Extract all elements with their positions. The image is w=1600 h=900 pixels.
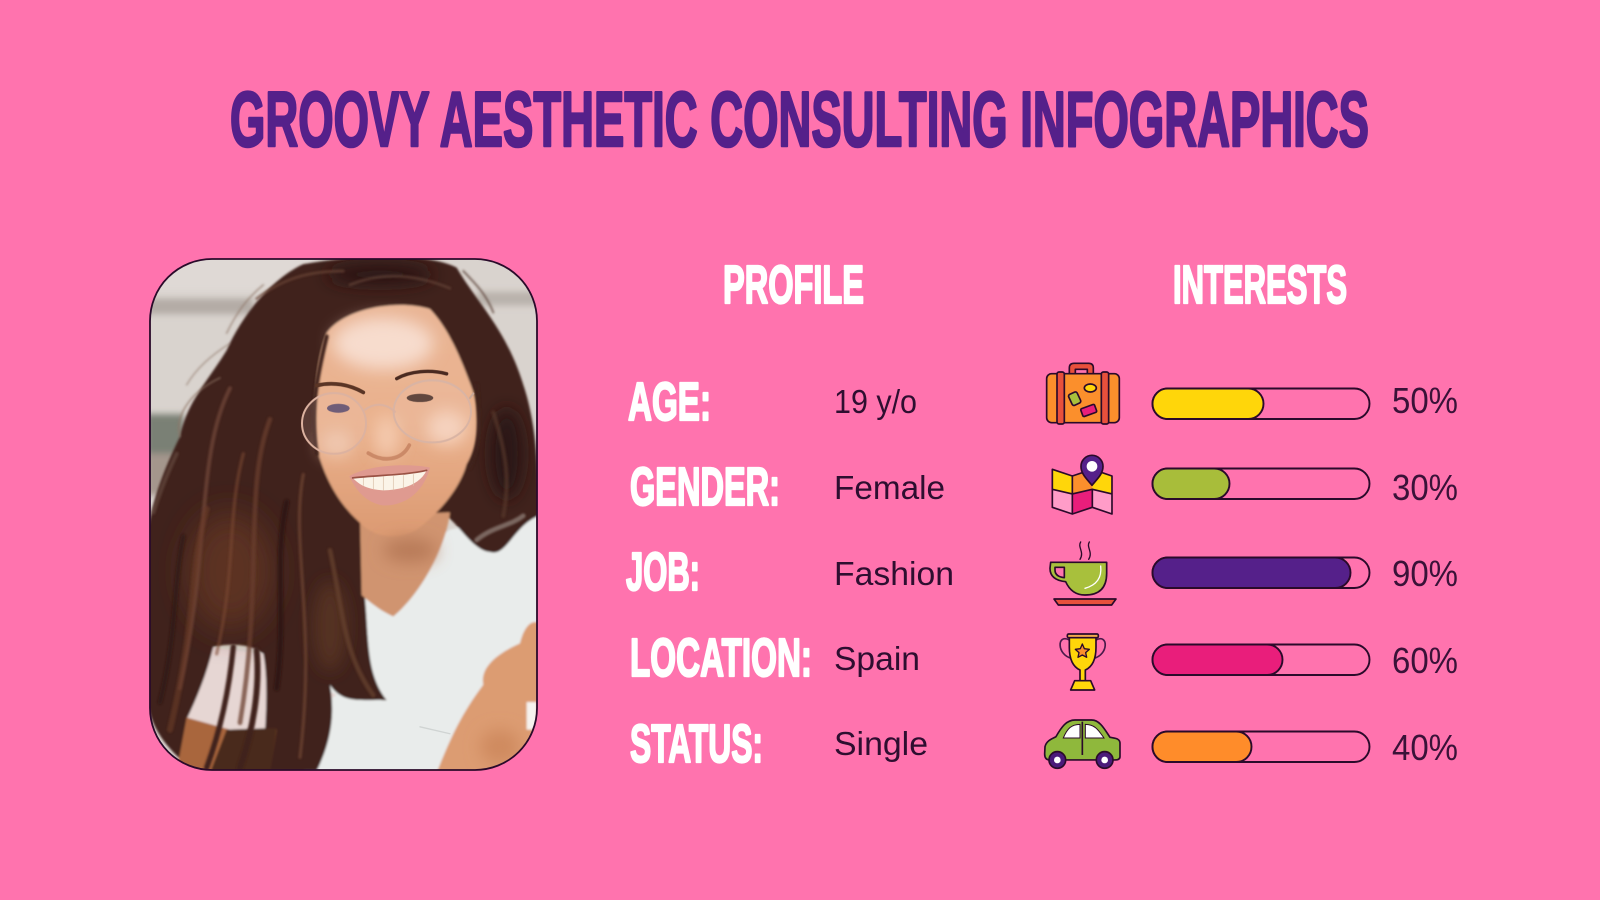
label: 30%: 30% [1392, 467, 1458, 508]
location label: LOCATION: [630, 628, 812, 688]
profile rows [626, 372, 954, 774]
bar: 60% [1152, 644, 1370, 675]
status value: Single [834, 725, 928, 762]
bar: 90% [1152, 558, 1370, 588]
gender value: Female [834, 469, 945, 506]
nose [368, 445, 409, 459]
icon: teacup [1050, 542, 1116, 605]
icon: car [1045, 720, 1120, 768]
hair strands [180, 388, 230, 688]
job label: JOB: [626, 542, 700, 602]
age value: 19 y/o [834, 383, 917, 420]
bar: 50% [1152, 388, 1370, 419]
location value: Spain [834, 640, 920, 677]
heading: profile: PROFILE [723, 255, 864, 315]
icon: map with pin [1052, 455, 1112, 514]
glasses [302, 393, 366, 454]
bar: 30% [1152, 468, 1370, 499]
portrait photo [147, 254, 540, 778]
icon: suitcase [1047, 363, 1119, 424]
gender label: GENDER: [630, 457, 780, 517]
heading: interests: INTERESTS [1173, 255, 1347, 315]
label: 90%: 90% [1392, 553, 1458, 594]
status label: STATUS: [630, 714, 763, 774]
mouth [349, 465, 430, 506]
face [315, 305, 478, 536]
back hair and neck [147, 257, 538, 771]
hair tone patches [187, 512, 273, 630]
pocket line [420, 727, 450, 734]
eyebrows and eyes [317, 384, 363, 392]
job value: Fashion [834, 555, 954, 592]
shirt [147, 257, 540, 778]
label: 40%: 40% [1392, 727, 1458, 768]
skin tone patches [333, 318, 433, 369]
label: 50%: 50% [1392, 380, 1458, 421]
hand and arm [437, 622, 538, 774]
icon: trophy [1060, 634, 1105, 690]
label: 60%: 60% [1392, 640, 1458, 681]
bar: 40% [1152, 732, 1370, 762]
age label: AGE: [628, 372, 711, 432]
